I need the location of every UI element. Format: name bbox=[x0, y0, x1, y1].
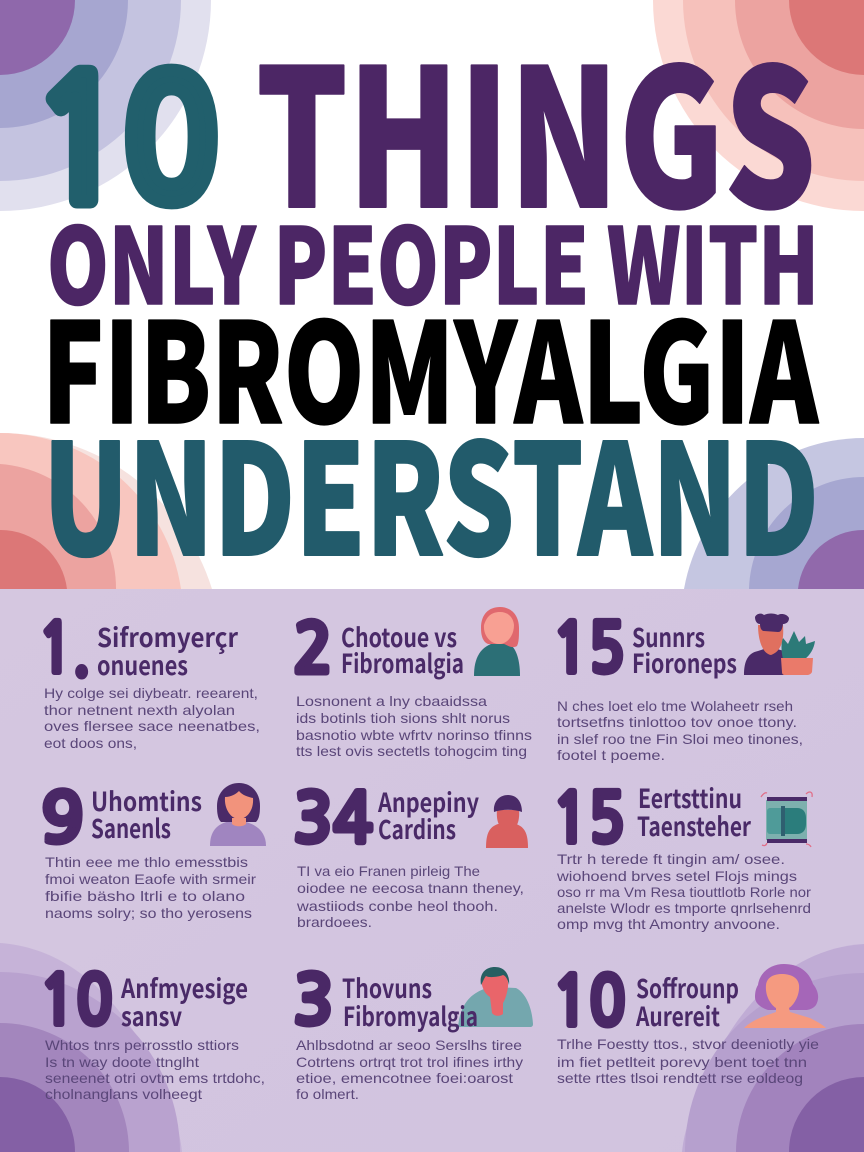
body text: seneenet otri ovtm ems trtdohc, bbox=[45, 1070, 265, 1086]
body text bbox=[296, 1037, 523, 1102]
heading: sansv bbox=[121, 997, 182, 1034]
body text: Cotrtens ortrqt trot trol ifines irthy bbox=[296, 1054, 523, 1070]
body text: omp mvg tht Amontry anvoone. bbox=[557, 916, 780, 932]
heading: Soffrounp bbox=[636, 969, 739, 1006]
heading bbox=[342, 969, 478, 1034]
body text: footel t poeme. bbox=[557, 747, 665, 763]
body text: Ahlbsdotnd ar seoo Serslhs tiree bbox=[296, 1037, 522, 1053]
heading bbox=[120, 969, 248, 1034]
heading: Anpepiny bbox=[377, 783, 479, 820]
heading bbox=[377, 783, 479, 847]
body text: fmoi weaton Eaofe with srmeir bbox=[45, 871, 256, 887]
body text: Is tn way doote ttnglht bbox=[45, 1054, 199, 1070]
body text bbox=[557, 1036, 819, 1086]
icon: framed box bbox=[761, 792, 812, 847]
concentric circles: panel bottom left bbox=[0, 943, 182, 1152]
icon: person with plant bbox=[744, 614, 815, 675]
number: 15 bbox=[552, 616, 625, 684]
heading: onuenes bbox=[97, 646, 188, 683]
panel: item 6 bbox=[552, 779, 812, 932]
body text bbox=[44, 685, 260, 751]
body text: ids botinls tioh sions shlt norus bbox=[296, 710, 510, 726]
concentric circles: panel bottom right bbox=[682, 944, 864, 1152]
number: 3 bbox=[293, 968, 334, 1036]
title: 10: 10 bbox=[31, 57, 213, 227]
body text: anelste Wlodr es tmporte qnrlsehenrd bbox=[557, 900, 811, 916]
heading: Sunnrs bbox=[632, 618, 705, 655]
body text: Trtr h terede ft tingin am/ osee. bbox=[557, 851, 785, 867]
body text: im fiet petlteit porevy bent toet tnn bbox=[557, 1054, 807, 1070]
body text: Thtin eee me thlo emesstbis bbox=[45, 854, 248, 870]
number: 10 bbox=[39, 968, 113, 1036]
body text bbox=[45, 854, 256, 921]
heading bbox=[635, 969, 739, 1034]
panel: item 4 bbox=[41, 782, 266, 921]
body text: brardoees. bbox=[297, 914, 372, 930]
heading: Sanenls bbox=[91, 809, 171, 846]
heading: Eertsttinu bbox=[638, 779, 742, 816]
panel: item 5 bbox=[293, 783, 528, 930]
panel: item 9 bbox=[552, 964, 826, 1086]
concentric circles: header bottom right bbox=[684, 438, 864, 589]
body text: oiodee ne eecosa tnann theney, bbox=[297, 880, 524, 896]
body text: eot doos ons, bbox=[44, 735, 137, 751]
body text: cholnanglans volheegt bbox=[45, 1086, 202, 1102]
panel: item 8 bbox=[293, 967, 533, 1102]
body text: in slef roo tne Fin Sloi meo tinones, bbox=[557, 731, 803, 747]
number: 9 bbox=[41, 786, 84, 854]
body text bbox=[557, 698, 803, 763]
body text: basnotio wbte wfrtv norinso tfinns bbox=[296, 727, 532, 743]
concentric circles: header bottom left bbox=[0, 433, 212, 589]
number: 10 bbox=[552, 970, 626, 1036]
body text: oso rr ma Vm Resa tiouttlotb Rorle nor bbox=[557, 884, 811, 900]
body text: wastiiods conbe heol thooh. bbox=[296, 898, 498, 914]
body text bbox=[296, 863, 524, 930]
number: 2 bbox=[293, 616, 333, 684]
header background bbox=[0, 0, 864, 590]
heading bbox=[341, 618, 464, 681]
body text: naoms solry; so tho yerosens bbox=[45, 905, 252, 921]
body text: Losnonent a lny cbaaidssa bbox=[296, 693, 487, 709]
concentric circles: top right bbox=[653, 0, 864, 211]
heading: Taensteher bbox=[637, 807, 752, 844]
concentric circles: top left bbox=[0, 0, 211, 211]
body text: tortsetfns tinlottoo tov onoe ttony. bbox=[557, 714, 797, 730]
lower panel background bbox=[0, 589, 864, 1152]
body text: oves flersee sace neenatbes, bbox=[44, 718, 260, 734]
body text bbox=[296, 693, 532, 759]
body text bbox=[556, 851, 811, 932]
icon: person with crossed arms bbox=[486, 795, 528, 848]
panel: item 7 bbox=[39, 968, 265, 1102]
heading: Sifromyerçr bbox=[97, 618, 239, 655]
icon: smiling woman bbox=[210, 783, 266, 846]
heading: Anfmyesige bbox=[120, 969, 248, 1006]
heading bbox=[97, 618, 239, 683]
heading bbox=[637, 779, 752, 844]
title bbox=[31, 0, 819, 600]
icon: woman with red hair bbox=[474, 607, 520, 676]
heading: Chotoue vs bbox=[341, 618, 457, 655]
body text: tts lest ovis sectetls tohogcim ting bbox=[296, 743, 527, 759]
body text: thor netnent nexth alyolan bbox=[44, 702, 235, 718]
body text: Hy colge sei diybeatr. reearent, bbox=[44, 685, 258, 701]
number: 34 bbox=[293, 786, 373, 854]
body text: Whtos tnrs perrosstlo sttiors bbox=[45, 1037, 239, 1053]
body text: etioe, emencotnee foei:oarost bbox=[296, 1070, 513, 1086]
number: 1. bbox=[38, 616, 90, 684]
heading: Thovuns bbox=[342, 969, 432, 1006]
heading: Cardins bbox=[378, 810, 456, 847]
heading bbox=[91, 782, 202, 846]
icon: woman with wavy hair bbox=[744, 964, 826, 1028]
body text bbox=[45, 1037, 265, 1102]
heading: Aurereit bbox=[635, 997, 720, 1034]
body text: TI va eio Franen pirleig The bbox=[297, 863, 480, 879]
body text: N ches loet elo tme Wolaheetr rseh bbox=[557, 698, 793, 714]
heading: Fioroneps bbox=[632, 644, 737, 681]
panel: item 3 bbox=[552, 614, 815, 763]
heading bbox=[632, 618, 737, 681]
number: 15 bbox=[552, 786, 625, 854]
body text: wiohoend brves setel Flojs mings bbox=[556, 868, 797, 884]
icon: person holding neck bbox=[458, 967, 533, 1027]
body text: Trlhe Foestty ttos., stvor deeniotly yie bbox=[557, 1036, 819, 1052]
heading: Uhomtins bbox=[91, 782, 202, 819]
panel: item 1 bbox=[38, 616, 260, 751]
body text: sette rttes tlsoi rendtett rse eoldeog bbox=[557, 1070, 803, 1086]
heading: Fibromalgia bbox=[341, 644, 464, 681]
body text: fbifie bäsho ltrli e to olano bbox=[45, 888, 245, 904]
heading: Fibromyalgia bbox=[343, 997, 478, 1034]
panel: item 2 bbox=[293, 607, 532, 759]
body text: fo olmert. bbox=[296, 1086, 359, 1102]
